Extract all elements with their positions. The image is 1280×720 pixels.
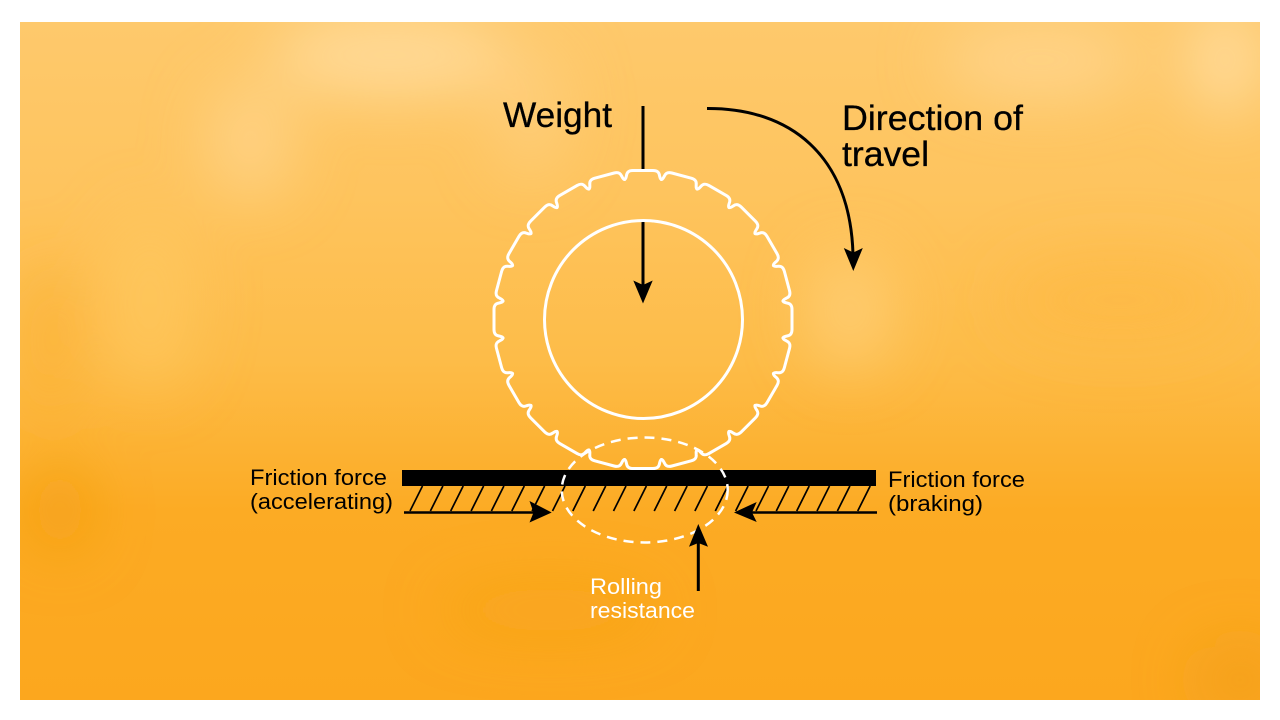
- arrow: direction of travel: [707, 108, 863, 271]
- label: friction force braking: Friction force: [888, 467, 1025, 492]
- arrow: rolling resistance: [689, 524, 708, 591]
- label: direction of travel: Direction of: [842, 99, 1023, 138]
- label: direction of travel: travel: [842, 135, 929, 174]
- arrow: weight lower shaft and head: [633, 221, 653, 304]
- label: rolling resistance: resistance: [590, 598, 695, 623]
- label: direction of travel: [842, 99, 1023, 174]
- label: friction force accelerating: Friction force: [250, 465, 387, 490]
- tyre outline: [494, 170, 792, 468]
- label: friction force accelerating: (accelerating): [250, 489, 393, 514]
- label: rolling resistance: [590, 574, 695, 623]
- arrow: friction braking: [734, 502, 877, 522]
- road surface bar: [402, 470, 876, 486]
- title label: weight: Weight: [503, 96, 612, 135]
- label: friction force braking: [888, 467, 1025, 516]
- tyre inner rim: [544, 220, 742, 418]
- road hatching: [410, 486, 870, 511]
- arrow: weight upper shaft: [642, 106, 644, 170]
- label: friction force braking: (braking): [888, 491, 983, 516]
- contact patch dashed ellipse: [562, 438, 728, 542]
- arrow: friction accelerating: [404, 501, 552, 522]
- label: friction force accelerating: [250, 465, 393, 514]
- label: rolling resistance: Rolling: [590, 574, 662, 599]
